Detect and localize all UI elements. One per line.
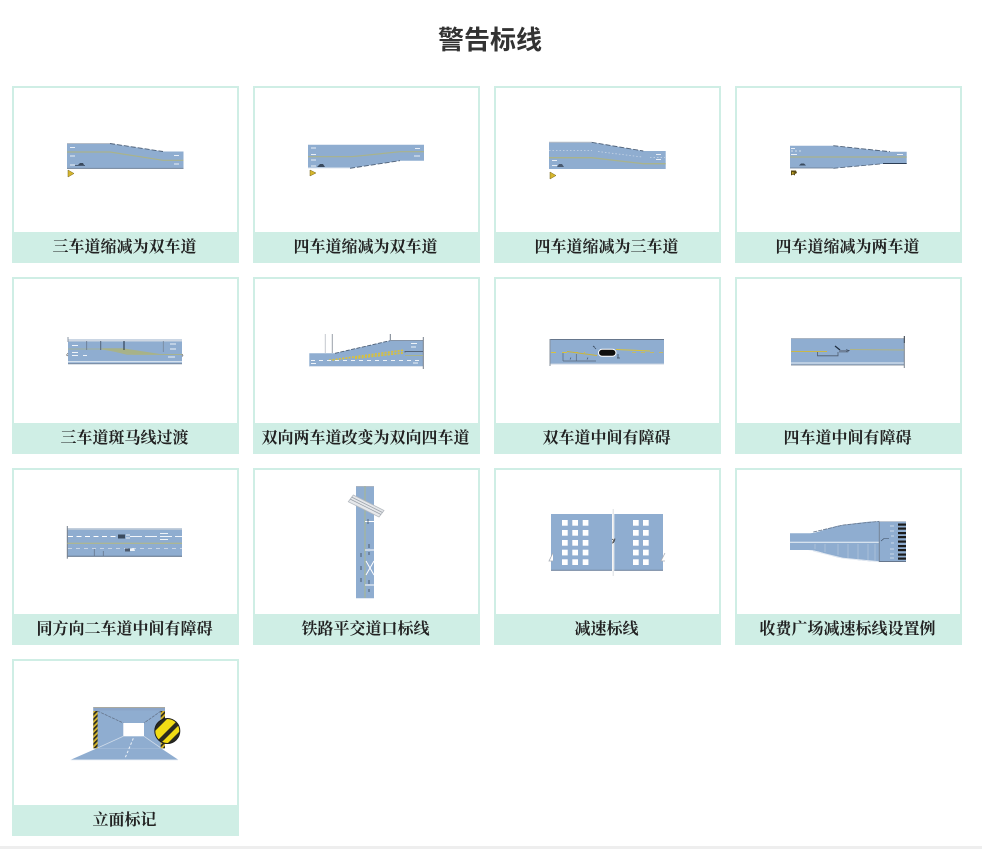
diagram: toll plaza bbox=[790, 520, 906, 562]
diagram: divided road with obstacles bbox=[66, 526, 182, 559]
caption: 三车道斑马线过渡 bbox=[60, 430, 188, 447]
railway tracks bbox=[348, 495, 384, 517]
caption: 减速标线 bbox=[574, 621, 638, 638]
panel: four-lane road with obstacle bbox=[735, 277, 962, 454]
diagram: tunnel elevation bbox=[70, 707, 180, 760]
white squares bbox=[562, 520, 649, 565]
diagram: symmetric taper bbox=[790, 145, 907, 176]
toll lanes bbox=[898, 524, 906, 560]
caption: 三车道缩减为双车道 bbox=[52, 239, 196, 256]
caption: 铁路平交道口标线 bbox=[301, 621, 430, 638]
caption bbox=[252, 232, 479, 263]
diagram: four to three lane taper bbox=[549, 142, 666, 180]
diagram: speed reduction blocks bbox=[548, 509, 666, 576]
diagram: lane widening bbox=[309, 334, 424, 369]
road surface bbox=[71, 748, 178, 760]
title: 警告标线 bbox=[438, 25, 542, 55]
caption bbox=[11, 232, 238, 263]
diagram: zebra transition bbox=[66, 337, 184, 364]
diagram: obstacle in four-lane road bbox=[791, 336, 905, 368]
panel: four lanes reduced to three bbox=[494, 86, 721, 263]
caption bbox=[252, 423, 479, 454]
caption: 四车道缩减为双车道 bbox=[293, 239, 438, 256]
caption: 双车道中间有障碍 bbox=[542, 430, 670, 447]
diagram: obstacle in two-lane road bbox=[550, 339, 664, 366]
panel: railway level crossing markings bbox=[253, 468, 480, 645]
caption bbox=[734, 423, 961, 454]
caption bbox=[493, 232, 720, 263]
caption bbox=[11, 614, 238, 645]
panel: three lanes reduced to two bbox=[12, 86, 239, 263]
panel: speed reduction markings bbox=[494, 468, 721, 645]
caption bbox=[493, 614, 720, 645]
caption bbox=[11, 423, 238, 454]
caption bbox=[493, 423, 720, 454]
diagram: three to two lane taper bbox=[67, 143, 184, 178]
caption: 四车道缩减为两车道 bbox=[775, 239, 920, 256]
footer strip bbox=[0, 846, 982, 849]
panel: four lanes reduced to two bbox=[253, 86, 480, 263]
caption: 立面标记 bbox=[92, 812, 156, 829]
icon: hazard circle bbox=[154, 718, 180, 744]
tunnel opening bbox=[123, 723, 144, 736]
caption bbox=[734, 614, 961, 645]
caption: 收费广场减速标线设置例 bbox=[759, 621, 936, 638]
caption: 双向两车道改变为双向四车道 bbox=[261, 430, 470, 447]
panel: elevation marking bbox=[12, 659, 239, 836]
panel: same-direction two-lane road with obstacle bbox=[12, 468, 239, 645]
caption bbox=[11, 805, 238, 836]
panel: toll plaza speed reduction markings bbox=[735, 468, 962, 645]
caption bbox=[734, 232, 961, 263]
panel: two-way two lanes to two-way four lanes bbox=[253, 277, 480, 454]
caption: 同方向二车道中间有障碍 bbox=[36, 621, 212, 638]
caption bbox=[252, 614, 479, 645]
diagram: four to two lane taper bbox=[308, 144, 424, 176]
caption: 四车道缩减为三车道 bbox=[534, 239, 678, 256]
obstacle bbox=[598, 349, 616, 356]
panel: four lanes narrowed to two bbox=[735, 86, 962, 263]
panel: three-lane zebra transition bbox=[12, 277, 239, 454]
panel: two-lane road with obstacle bbox=[494, 277, 721, 454]
caption: 四车道中间有障碍 bbox=[783, 430, 912, 447]
diagram: railway crossing bbox=[348, 486, 384, 598]
